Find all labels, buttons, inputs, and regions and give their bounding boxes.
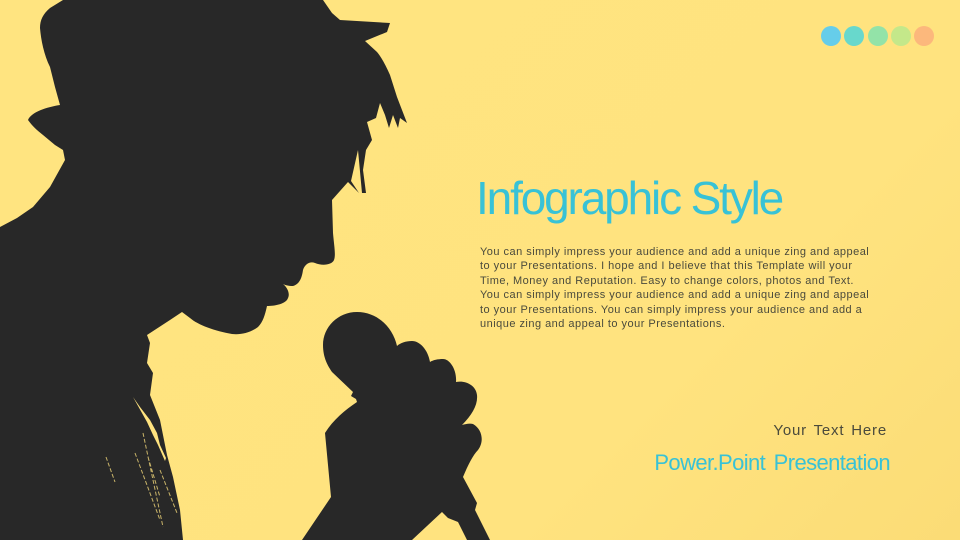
body text [480,246,869,330]
hair gaps [106,397,177,527]
body text: to your Presentations. You can simply impress your audience and add a [480,304,862,316]
body text: Time, Money and Reputation. Easy to change colors, photos and Text. [480,275,854,287]
title: Infographic Style [476,172,782,224]
caption: Your Text Here [773,422,887,439]
body text: to your Presentations. I hope and I believe that this Template will your [480,260,852,272]
body text: You can simply impress your audience and add a unique zing and appeal [480,246,869,258]
subtitle: Power.Point Presentation [654,450,890,475]
palette dots [821,26,934,46]
body text: unique zing and appeal to your Presentations. [480,318,725,330]
singer head and body [0,0,407,540]
body text: You can simply impress your audience and add a unique zing and appeal [480,289,869,301]
microphone and hand [302,312,490,540]
